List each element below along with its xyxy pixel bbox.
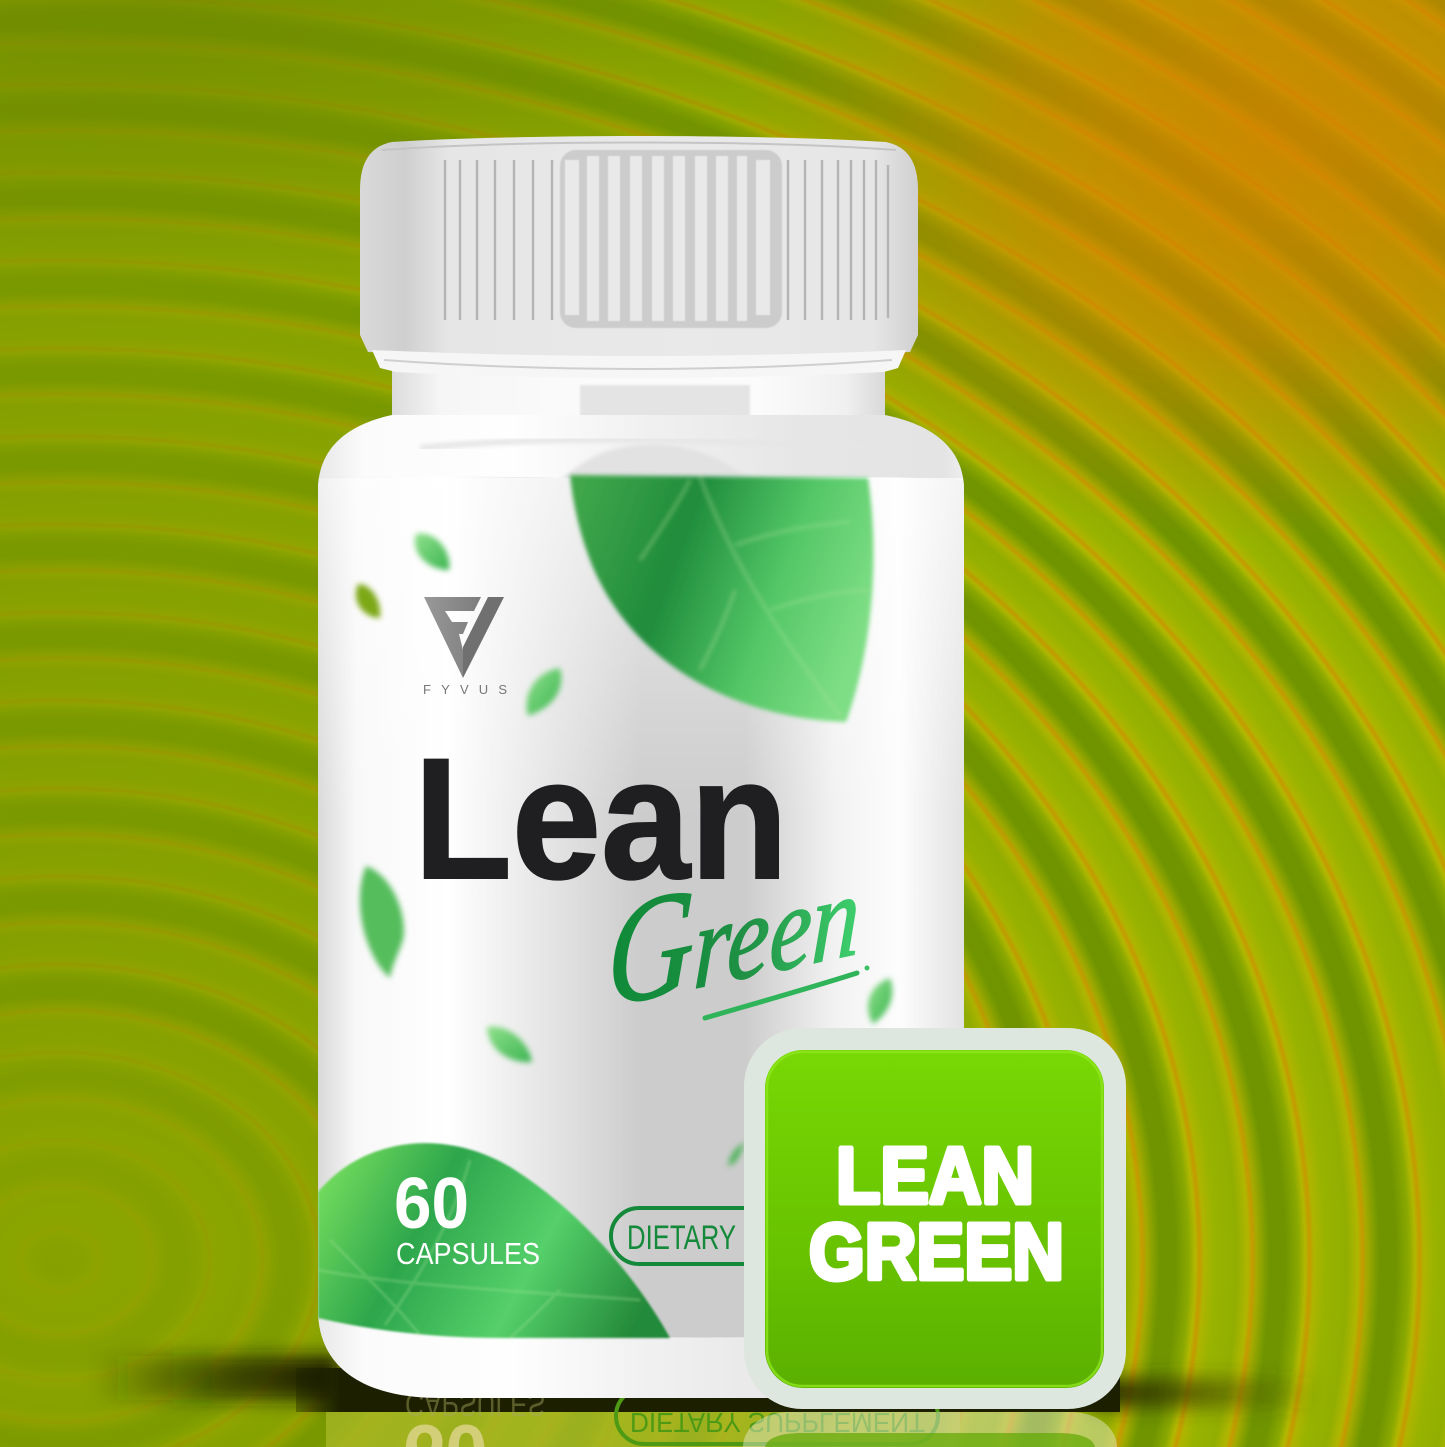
badge title: LEAN	[836, 1131, 1034, 1220]
capsule count: CAPSULES	[396, 1236, 540, 1271]
logo: Fyvus: FYVUS	[423, 682, 507, 697]
cap ribs	[445, 160, 888, 320]
product name: Green script: Green	[605, 820, 863, 1040]
capsule count: 60	[394, 1164, 469, 1244]
reflected capsule text	[403, 1386, 545, 1447]
logo: Fyvus	[423, 597, 507, 697]
dietary supplement pill	[611, 1208, 917, 1264]
reflected badge	[743, 1412, 1117, 1447]
bottle reflection	[326, 1386, 1117, 1447]
floor shadow	[90, 1356, 1320, 1412]
script underline	[705, 973, 857, 1018]
collar	[372, 350, 906, 378]
reflected capsule text: CAPSULES	[405, 1386, 545, 1423]
capsule count	[394, 1164, 540, 1271]
bottle neck	[392, 345, 885, 440]
reflected pill text: DIETARY SUPPLEMENT	[630, 1407, 925, 1438]
large leaf: bottom	[318, 1143, 670, 1338]
label	[318, 475, 964, 1338]
product name: Lean: Lean	[414, 723, 788, 915]
badge: Lean Green	[744, 1028, 1126, 1409]
cap top rim	[382, 142, 896, 150]
bottle	[318, 136, 964, 1398]
large leaf: top	[570, 475, 873, 722]
badge title	[809, 1131, 1064, 1296]
bottle body	[318, 415, 964, 1398]
script dot	[864, 966, 870, 970]
cap	[360, 136, 918, 378]
dietary supplement pill: DIETARY SUPPLEMENT	[627, 1219, 917, 1257]
badge title: GREEN	[809, 1207, 1064, 1296]
cap centre grip	[560, 150, 782, 328]
reflected pill text	[616, 1388, 938, 1444]
small floating leaves	[356, 534, 892, 1166]
